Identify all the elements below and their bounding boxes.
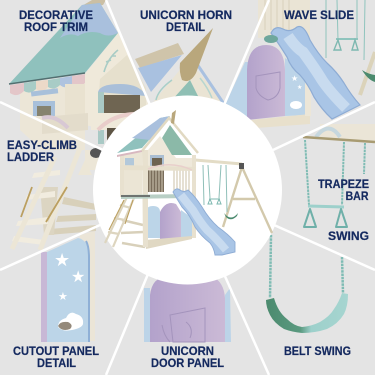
unicorn horn bbox=[180, 28, 213, 81]
vine right bbox=[200, 78, 212, 98]
gable wall bbox=[85, 32, 150, 128]
horn bbox=[171, 110, 176, 124]
rail arch bbox=[148, 165, 192, 170]
roof edge bbox=[9, 73, 85, 84]
beam bbox=[303, 137, 375, 142]
cloud cutout bbox=[290, 101, 302, 109]
roof bbox=[9, 3, 118, 84]
panel: trapeze bar bbox=[303, 124, 375, 227]
roof right edge bbox=[197, 64, 224, 104]
gable interior bbox=[98, 55, 146, 110]
wall post bbox=[65, 84, 85, 116]
panel: cutout panel detail bbox=[41, 231, 95, 342]
back frame bbox=[121, 220, 145, 247]
panel stars: ★ bbox=[291, 74, 298, 83]
window side frame bbox=[98, 92, 104, 144]
label: unicorn door panel: DOOR PANEL bbox=[151, 358, 224, 370]
a-frame leg bbox=[360, 52, 375, 95]
right blue panel bbox=[181, 210, 192, 238]
a-frame bbox=[223, 167, 272, 233]
large window bbox=[104, 95, 140, 113]
railing dark balusters bbox=[148, 167, 164, 192]
vine bbox=[156, 80, 172, 100]
left chain bbox=[270, 235, 271, 298]
mini seat bbox=[224, 213, 238, 219]
room dark bbox=[152, 158, 162, 168]
base bbox=[145, 236, 192, 249]
panel: unicorn horn detail bbox=[135, 28, 226, 106]
roof blue bbox=[132, 116, 170, 140]
roof blue shading bbox=[60, 3, 118, 38]
platform bbox=[121, 194, 190, 199]
blue left strip bbox=[144, 288, 150, 342]
playset illustration bbox=[105, 110, 272, 255]
right rainbow bbox=[98, 114, 134, 130]
baluster lines bbox=[150, 167, 162, 192]
rainbows bbox=[42, 117, 68, 128]
house body bbox=[20, 75, 150, 170]
panel: decorative roof trim bbox=[9, 0, 150, 170]
ladder rail right bbox=[40, 148, 80, 250]
rungs bbox=[12, 170, 60, 245]
chains bbox=[305, 140, 365, 205]
gable wall bbox=[148, 136, 192, 168]
label: unicorn horn detail: UNICORN HORN bbox=[140, 10, 232, 22]
cream edge bbox=[80, 231, 95, 341]
label: cutout panel detail: CUTOUT PANEL bbox=[13, 346, 99, 358]
room window bbox=[150, 155, 164, 168]
label: decorative roof trim: ROOF TRIM bbox=[24, 22, 88, 34]
ladder rail left bbox=[12, 157, 55, 249]
slide bbox=[271, 27, 360, 119]
trapeze bar bbox=[336, 38, 358, 40]
label: easy-climb ladder: EASY-CLIMB bbox=[7, 140, 77, 152]
eave bbox=[135, 43, 184, 68]
upper walls bbox=[124, 152, 142, 196]
slide channel bbox=[288, 36, 346, 108]
base bbox=[250, 114, 310, 128]
label: belt swing: BELT SWING bbox=[284, 346, 351, 358]
gable trim bbox=[150, 60, 226, 106]
trapeze rings bbox=[334, 40, 358, 50]
label: wave slide: WAVE SLIDE bbox=[284, 10, 354, 22]
slide channel bbox=[181, 195, 226, 250]
slide teal lip bbox=[264, 35, 278, 43]
roof bbox=[117, 116, 170, 153]
door crest bbox=[256, 72, 280, 100]
label: cutout panel detail: DETAIL bbox=[37, 358, 76, 370]
ladder bbox=[105, 197, 134, 247]
post bbox=[305, 40, 311, 116]
balusters bbox=[265, 0, 289, 30]
panel: unicorn door panel bbox=[144, 276, 231, 342]
left blue panel bbox=[225, 62, 248, 120]
label: decorative roof trim: DECORATIVE bbox=[19, 10, 93, 22]
beam cream bbox=[320, 124, 375, 142]
back steps bbox=[48, 197, 96, 235]
slide bbox=[173, 189, 235, 255]
frame bracket bbox=[239, 163, 244, 169]
blue arch bbox=[98, 84, 146, 96]
posts bbox=[120, 150, 196, 247]
panel: wave slide bbox=[225, 0, 375, 128]
roof blue bbox=[138, 55, 182, 92]
panel: belt swing bbox=[266, 235, 348, 333]
house upper bbox=[258, 0, 310, 38]
teal gable bbox=[172, 80, 200, 100]
right blue panel bbox=[285, 58, 305, 116]
label: trapeze bar: TRAPEZE bbox=[318, 179, 369, 191]
belt seat bbox=[266, 293, 348, 333]
lower dark room bbox=[107, 128, 125, 150]
label: swing: SWING bbox=[328, 231, 369, 243]
right handle bbox=[336, 209, 347, 227]
door bbox=[160, 203, 181, 240]
trapeze bar bbox=[308, 206, 344, 207]
support bbox=[78, 160, 92, 175]
label: trapeze bar: BAR bbox=[346, 191, 369, 203]
left handle bbox=[304, 209, 316, 227]
platform dark band bbox=[121, 195, 150, 197]
purple door bbox=[150, 276, 225, 342]
label: unicorn door panel: UNICORN bbox=[161, 346, 214, 358]
cloud bbox=[58, 313, 83, 331]
gable teal bbox=[162, 125, 192, 155]
beam rainbow bbox=[316, 128, 340, 137]
scallops bbox=[117, 150, 142, 157]
swing beam bbox=[195, 160, 242, 164]
ladder grab rails bbox=[109, 200, 133, 230]
rail boards bbox=[42, 113, 88, 134]
label: unicorn horn detail: DETAIL bbox=[166, 22, 205, 34]
left window bbox=[125, 158, 134, 170]
unicorn door bbox=[247, 45, 285, 120]
small window bbox=[33, 101, 55, 116]
centre circle bbox=[93, 96, 282, 284]
star one: ★ bbox=[54, 250, 70, 271]
rail bbox=[120, 165, 195, 171]
right balusters bbox=[174, 168, 189, 192]
scallop trim bbox=[10, 74, 85, 95]
right chain bbox=[342, 257, 343, 293]
blue right strip bbox=[225, 288, 231, 342]
star two: ★ bbox=[71, 267, 85, 286]
crest bbox=[170, 308, 205, 342]
panel edge bbox=[86, 241, 89, 342]
blue strip under roof bbox=[31, 88, 58, 97]
purple strip bbox=[41, 252, 48, 342]
vine ornament bbox=[104, 50, 118, 72]
bracket bbox=[90, 148, 102, 158]
gable trim bbox=[142, 118, 198, 153]
panel: easy-climb ladder bbox=[12, 148, 102, 250]
star three: ★ bbox=[58, 290, 68, 303]
crest detail bbox=[162, 322, 191, 342]
trapeze ropes bbox=[326, 0, 365, 60]
trapeze and swing ropes bbox=[203, 165, 227, 212]
green seat bbox=[362, 70, 375, 82]
cloud cut shade bbox=[58, 322, 72, 330]
post bbox=[40, 187, 58, 235]
second star: ★ bbox=[297, 84, 302, 91]
blue panel bbox=[47, 238, 90, 342]
right rail board bbox=[91, 113, 136, 130]
roof finial base bbox=[80, 0, 106, 7]
grab rails bbox=[21, 187, 67, 222]
left blue panel bbox=[147, 206, 160, 238]
mini trapeze bbox=[208, 199, 221, 204]
label: easy-climb ladder: LADDER bbox=[7, 152, 55, 164]
